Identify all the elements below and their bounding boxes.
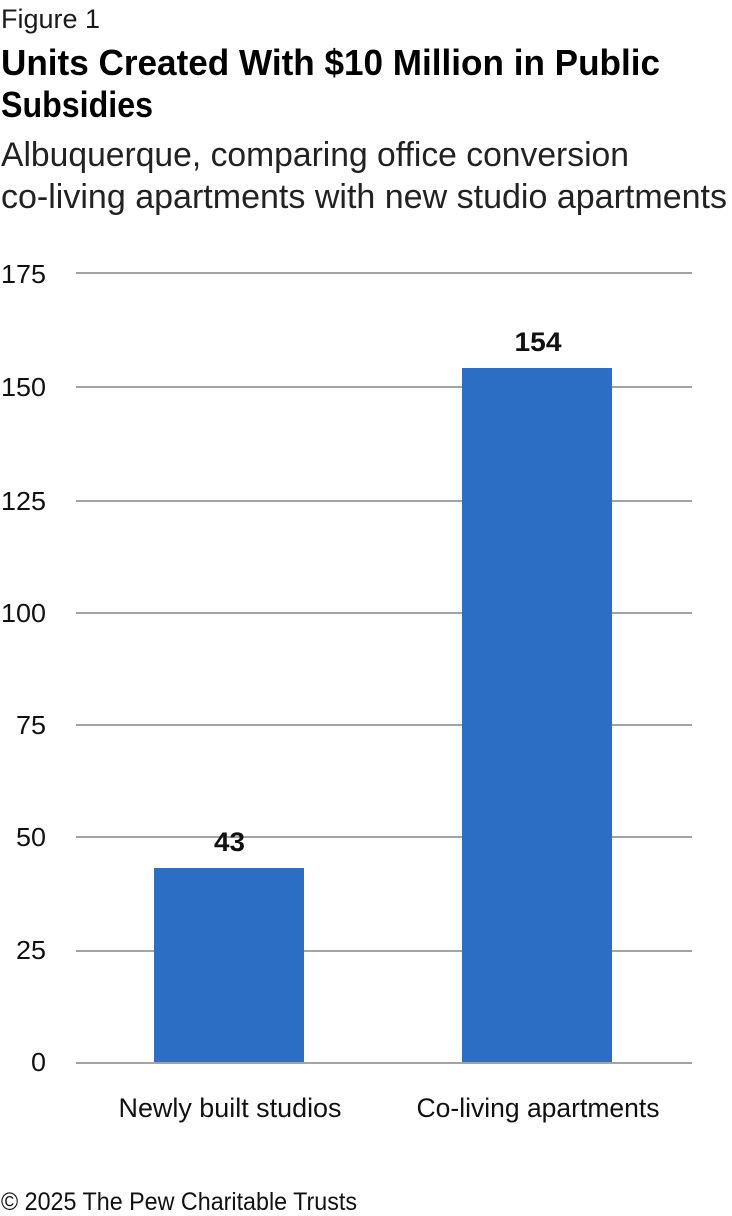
bar chart [1, 259, 692, 1123]
y-axis labels: 100 [1, 598, 46, 628]
y-axis labels: 125 [1, 486, 46, 516]
value label: 154: 154 [514, 327, 562, 357]
category label: newly built studios: Newly built studios [118, 1093, 342, 1123]
bar: newly built studios [154, 868, 304, 1062]
y-axis labels: 25 [16, 935, 46, 965]
copyright footer: © 2025 The Pew Charitable Trusts [1, 1188, 357, 1216]
subtitle [1, 136, 727, 216]
subtitle: Albuquerque, comparing office conversion [1, 136, 629, 174]
figure label: Figure 1 [1, 4, 100, 34]
y-axis labels: 75 [16, 710, 46, 740]
y-axis labels: 0 [31, 1047, 46, 1077]
y-axis gridlines [76, 273, 692, 1063]
value label: 43: 43 [214, 827, 245, 857]
y-axis labels: 50 [16, 822, 46, 852]
title [1, 42, 660, 125]
y-axis labels: 175 [1, 259, 46, 289]
title: Subsidies [1, 84, 153, 125]
title: Units Created With $10 Million in Public [1, 42, 660, 83]
bar: co-living apartments [462, 368, 612, 1062]
subtitle: co-living apartments with new studio apartments [1, 178, 727, 216]
y-axis labels [1, 259, 46, 1077]
category label: co-living apartments: Co-living apartments [416, 1093, 660, 1123]
y-axis labels: 150 [1, 372, 46, 402]
